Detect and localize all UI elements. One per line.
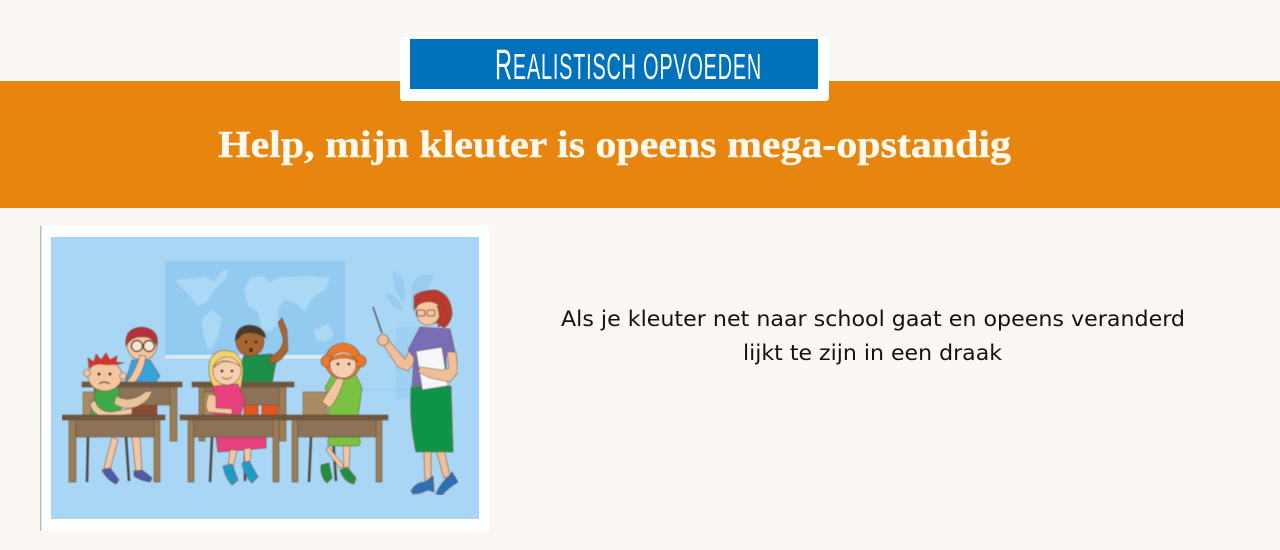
front desks (62, 415, 388, 482)
photo frame (40, 226, 489, 531)
orange header band (0, 81, 1280, 208)
title: Help, mijn kleuter is opeens mega-opstandig (218, 124, 1011, 166)
scene (62, 261, 458, 495)
intro text: Als je kleuter net naar school gaat en opeens veranderd (561, 307, 1185, 332)
banner blue label (410, 39, 818, 89)
world map (165, 261, 345, 358)
intro text (561, 307, 1185, 366)
banner blue label: REALISTISCH OPVOEDEN (495, 42, 761, 89)
teacher (373, 290, 458, 495)
banner: Realistisch opvoeden (400, 37, 829, 101)
pupil: boy with dark skin and raised hand (235, 318, 288, 416)
intro text: lijkt te zijn in een draak (743, 341, 1003, 366)
pupil: red-haired boy (84, 353, 152, 484)
pupil: boy with glasses (125, 327, 160, 415)
back desks (82, 382, 294, 441)
background plant (362, 271, 435, 398)
pupil: orange-haired girl (321, 343, 366, 484)
chairs (83, 392, 336, 482)
pupil: blonde girl (206, 350, 266, 485)
